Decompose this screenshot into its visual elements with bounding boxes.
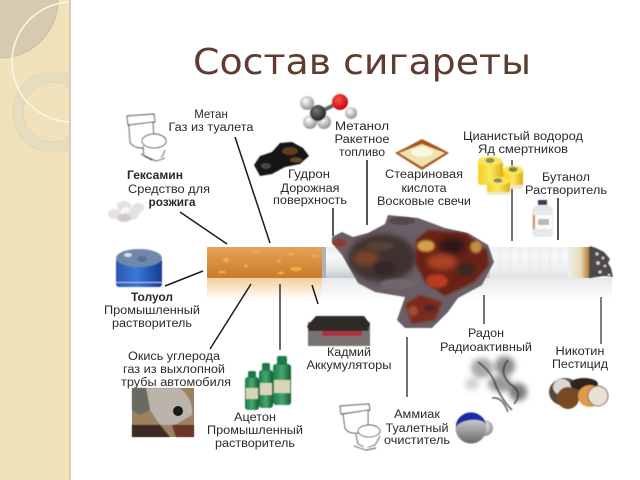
label: toluene: Толуол [131, 292, 173, 304]
label: nicotine [552, 346, 608, 371]
label: radon [440, 328, 532, 354]
icon: green acetone bottles [245, 356, 291, 410]
icon: ammonia molecule [456, 412, 493, 444]
connector lines [165, 137, 601, 397]
label: hydrogen cyanide [463, 131, 583, 156]
icon: tobacco and cigarette bundles [549, 378, 608, 409]
icon: methanol molecule [300, 94, 357, 129]
label: carbon monoxide: трубы автомобиля [121, 377, 231, 389]
label: ammonia: Аммиак [394, 409, 441, 421]
label: butanol: Растворитель [525, 185, 607, 197]
label: methanol: Метанол [335, 121, 389, 133]
label: ammonia: очиститель [384, 435, 450, 447]
label: toluene [104, 292, 200, 330]
label: tar: Дорожная [280, 183, 340, 195]
label: tar: Гудрон [288, 169, 330, 181]
label: toluene: Промышленный [104, 305, 200, 317]
icon: tar lump [254, 142, 309, 176]
label: methanol [334, 121, 390, 159]
label: radon: Радон [468, 328, 504, 340]
label: methanol: Ракетное [334, 134, 390, 146]
icon: hexamine tablets [108, 201, 144, 222]
label: hexamine: Гексамин [127, 170, 183, 182]
icon: stearic acid powder [395, 139, 449, 170]
label: butanol: Бутанол [542, 172, 590, 184]
label: ammonia: Туалетный [386, 423, 448, 435]
label: acetone: Промышленный [207, 425, 303, 437]
title: Состав сигареты [193, 42, 531, 83]
label: methane: Метан [194, 109, 228, 121]
label: cadmium: Аккумуляторы [306, 360, 392, 372]
icon: toilet second [340, 404, 380, 450]
label: radon: Радиоактивный [440, 342, 532, 354]
tumorous lung [331, 215, 494, 328]
label: methanol: топливо [339, 147, 385, 159]
icon: blue toluene barrel [116, 249, 162, 287]
label: carbon monoxide [121, 351, 231, 389]
label: cadmium [306, 347, 392, 372]
label: methane: Газ из туалета [168, 122, 254, 134]
label: acetone: Ацетон [234, 412, 276, 424]
label: nicotine: Пестицид [552, 359, 608, 371]
label: nicotine: Никотин [556, 346, 604, 358]
panel: decorative left sidebar [0, 0, 69, 480]
label: ammonia [384, 409, 450, 447]
label: stearic acid: кислота [402, 183, 447, 195]
label: cadmium: Кадмий [327, 347, 371, 359]
label: stearic acid [377, 169, 471, 208]
label: toluene: растворитель [112, 318, 192, 330]
label: hexamine [127, 170, 210, 209]
label: carbon monoxide: газ из выхлопной [123, 364, 225, 376]
icon: gas mask photo [132, 388, 194, 437]
icon: butanol bottle [532, 200, 553, 237]
label: hexamine: розжига [148, 197, 196, 209]
label: tar: поверхность [273, 195, 347, 207]
icon: car battery [307, 316, 370, 346]
label: hexamine: Средство для [128, 184, 210, 196]
label: hydrogen cyanide: Цианистый водород [463, 131, 583, 143]
label: acetone: растворитель [215, 438, 295, 450]
label: stearic acid: Восковые свечи [377, 196, 471, 208]
label: methane [168, 109, 254, 134]
label: tar [273, 169, 347, 207]
label: carbon monoxide: Окись углерода [128, 351, 221, 363]
icon: toilet [127, 114, 166, 161]
label: butanol [525, 172, 607, 197]
label: acetone [207, 412, 303, 450]
cigarette [207, 246, 613, 300]
icon: yellow gas canisters [478, 156, 523, 195]
icon: smoke cloud [465, 356, 527, 412]
label: stearic acid: Стеариновая [385, 169, 463, 181]
label: hydrogen cyanide: Яд смертников [478, 144, 568, 156]
